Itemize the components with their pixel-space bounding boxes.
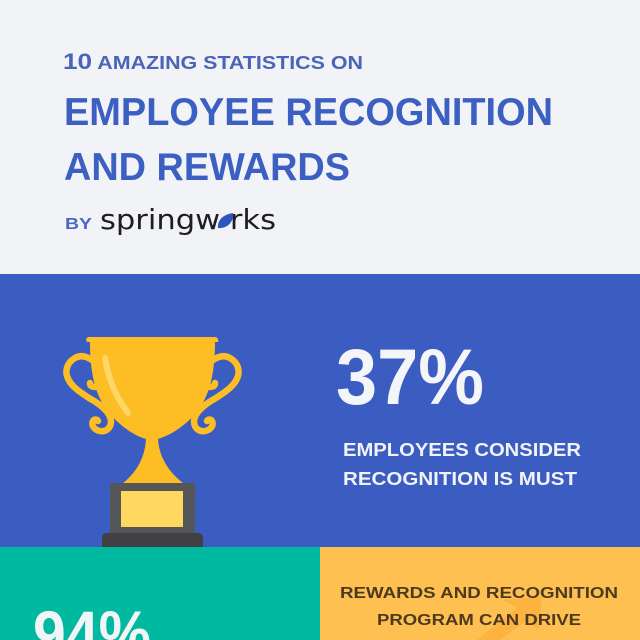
cup highlight [105, 358, 128, 413]
stat description: EMPLOYEES CONSIDER [343, 440, 581, 460]
byline logo: springw rks [100, 203, 276, 236]
rewards text: PROGRAM CAN DRIVE [377, 612, 581, 629]
byline logo: BY [65, 216, 92, 233]
icon: trophy [66, 337, 239, 547]
trophy cup [86, 337, 218, 483]
trophy plinth [102, 533, 203, 547]
stat: 37%: 37% [336, 332, 484, 421]
trophy handles [66, 356, 239, 431]
title: AND REWARDS [64, 146, 350, 189]
stat description: RECOGNITION IS MUST [343, 469, 577, 489]
trophy plaque [121, 491, 183, 527]
title: EMPLOYEE RECOGNITION [64, 91, 553, 134]
panel: 37 percent [0, 274, 640, 547]
panel: rewards program [320, 547, 640, 640]
rewards text: REWARDS AND RECOGNITION [340, 585, 618, 602]
icon: growth arrow [477, 597, 542, 640]
rewards text [340, 585, 618, 629]
icon: leaf [218, 213, 233, 228]
panel: 94 percent [0, 547, 320, 640]
subtitle: 10 AMAZING STATISTICS ON [63, 49, 363, 74]
trophy base [110, 483, 195, 535]
title [64, 91, 553, 189]
stat description [343, 440, 581, 489]
header panel [0, 0, 640, 274]
